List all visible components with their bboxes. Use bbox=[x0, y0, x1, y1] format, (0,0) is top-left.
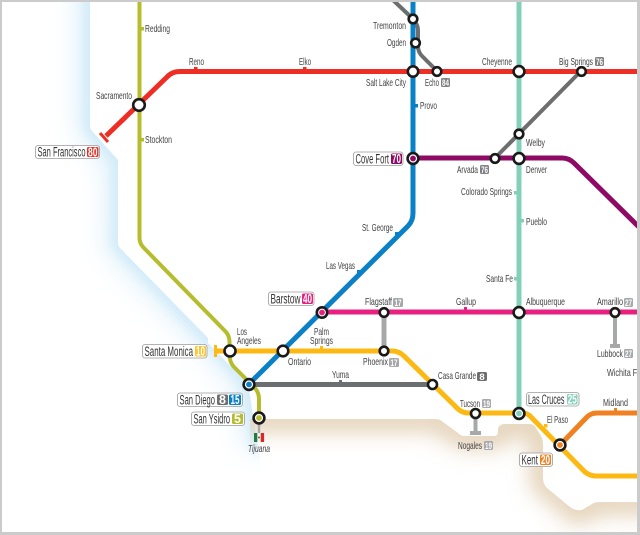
label: Reno: Reno bbox=[189, 56, 204, 68]
spur: Interstate 17 bbox=[382, 312, 386, 351]
line: Interstate 70 purple bbox=[413, 158, 640, 228]
terminal: Santa Monica bbox=[214, 345, 217, 357]
callout: San Ysidro 5: San Ysidro bbox=[194, 411, 230, 426]
label: Nogales 19: Nogales bbox=[458, 440, 482, 452]
label: Nogales 19: 19 bbox=[485, 441, 492, 452]
stations bbox=[133, 15, 619, 418]
label: Cheyenne: Cheyenne bbox=[482, 56, 512, 68]
terminal: San Francisco bbox=[100, 133, 108, 142]
spur: Interstate 27 bbox=[610, 312, 620, 346]
tick marks blue bbox=[357, 104, 418, 274]
station: Cove Fort bbox=[408, 153, 418, 164]
label: Arvada 76: Arvada bbox=[457, 164, 478, 176]
station: San Diego bbox=[244, 379, 254, 390]
line: Interstate 8 gray bbox=[249, 382, 432, 387]
label: Amarillo 27: 27 bbox=[625, 298, 632, 309]
callout: Kent 20: 20 bbox=[541, 453, 550, 467]
connector to Tijuana bbox=[258, 424, 260, 433]
label: Los Angeles bbox=[237, 326, 261, 347]
line: Interstate 80 red bbox=[106, 72, 637, 136]
line: Interstate 10 yellow bbox=[216, 351, 637, 476]
label: Las Vegas: Las Vegas bbox=[326, 260, 355, 272]
callout: Cove Fort 70: Cove Fort bbox=[356, 151, 389, 166]
line: Interstate 15 blue bbox=[249, 0, 413, 384]
label: Los Angeles: Angeles bbox=[237, 335, 261, 347]
label: Echo 84: Echo bbox=[425, 77, 439, 89]
label: Gallup: Gallup bbox=[456, 296, 476, 308]
land: Mexico bbox=[240, 419, 640, 512]
callout: Barstow 40: Barstow bbox=[270, 291, 301, 306]
callout: Santa Monica 10: 10 bbox=[196, 344, 205, 358]
callout: Kent 20: Kent bbox=[522, 452, 538, 467]
label: Palm Springs: Springs bbox=[310, 335, 333, 347]
label: Lubbock 27: Lubbock bbox=[597, 348, 623, 360]
label: Tucson 19: Tucson bbox=[460, 398, 480, 410]
water: Pacific coast bbox=[90, 0, 258, 450]
label: Midland: Midland bbox=[603, 397, 628, 409]
label: Big Springs 76: 76 bbox=[596, 57, 603, 68]
label: Tucson 19: 19 bbox=[483, 399, 490, 410]
label: Elko: Elko bbox=[299, 56, 311, 68]
station: San Ysidro bbox=[254, 413, 264, 423]
label: Casa Grande 8: Casa Grande bbox=[438, 370, 476, 382]
label: Phoenix 17: 17 bbox=[390, 358, 398, 369]
callout: San Ysidro 5: 5 bbox=[234, 412, 241, 426]
label: Colorado Springs: Colorado Springs bbox=[461, 186, 512, 198]
label: Echo 84: 84 bbox=[442, 78, 449, 89]
label: Santa Fe: Santa Fe bbox=[486, 273, 513, 285]
tick marks bbox=[194, 67, 306, 70]
label: Ontario: Ontario bbox=[288, 356, 311, 368]
callout: Las Cruces 25: 25 bbox=[568, 392, 577, 406]
label: Stockton: Stockton bbox=[145, 134, 172, 146]
label: Sacramento: Sacramento bbox=[96, 90, 132, 102]
label: Flagstaff 17: 17 bbox=[394, 298, 402, 309]
label: Denver: Denver bbox=[526, 164, 547, 176]
label: Amarillo 27: Amarillo bbox=[597, 296, 623, 308]
station: Kent bbox=[555, 440, 565, 450]
label: Phoenix 17: Phoenix bbox=[363, 356, 388, 368]
callout: San Diego 8 15: San Diego bbox=[180, 392, 215, 407]
spur: Interstate 19 bbox=[470, 413, 481, 433]
callout: Cove Fort 70: 70 bbox=[392, 152, 401, 166]
label: Lubbock 27: 27 bbox=[625, 349, 632, 360]
label: Los Angeles: Los bbox=[237, 326, 247, 338]
line: Interstate 40 pink bbox=[322, 310, 637, 314]
label: Pueblo: Pueblo bbox=[526, 216, 547, 228]
label: Redding: Redding bbox=[145, 23, 170, 35]
callout: San Francisco 80: San Francisco bbox=[38, 144, 86, 160]
label: Ogden: Ogden bbox=[387, 37, 406, 49]
line: Interstate 5 olive bbox=[140, 0, 259, 418]
tick marks others bbox=[320, 307, 617, 428]
station: Barstow bbox=[317, 307, 327, 318]
line: Interstate 20 orange bbox=[560, 413, 637, 445]
callout: Barstow 40: 40 bbox=[303, 292, 312, 306]
label: El Paso: El Paso bbox=[547, 414, 568, 426]
label: Casa Grande 8: 8 bbox=[479, 372, 485, 383]
label: Provo: Provo bbox=[420, 100, 437, 112]
tick marks teal bbox=[514, 191, 524, 280]
callout: Santa Monica 10: Santa Monica bbox=[144, 344, 193, 359]
label: Palm Springs bbox=[310, 326, 333, 347]
icon: Mexican flag bbox=[254, 433, 264, 442]
label: Flagstaff 17: Flagstaff bbox=[365, 296, 392, 308]
line: Interstate 25 teal bbox=[516, 0, 522, 413]
callout: Las Cruces 25: Las Cruces bbox=[528, 392, 565, 407]
label: Tremonton: Tremonton bbox=[373, 20, 406, 32]
label: Salt Lake City: Salt Lake City bbox=[366, 77, 406, 89]
callout: San Diego 8 15: 15 bbox=[230, 393, 240, 407]
label: Albuquerque: Albuquerque bbox=[526, 296, 565, 308]
line: Interstate 84 gray bbox=[393, 0, 437, 71]
label: Welby: Welby bbox=[526, 137, 545, 149]
label: Arvada 76: 76 bbox=[481, 165, 488, 176]
label: St. George: St. George bbox=[362, 222, 393, 234]
callout: San Diego 8 15: 8 bbox=[219, 393, 226, 407]
callout: San Francisco 80: 80 bbox=[88, 145, 97, 159]
label: Tijuana: Tijuana bbox=[248, 443, 270, 455]
label: Palm Springs: Palm bbox=[314, 326, 329, 338]
line: Interstate 76 gray bbox=[495, 71, 581, 158]
station: Las Cruces bbox=[514, 408, 524, 419]
tick marks olive bbox=[141, 27, 144, 142]
label: Yuma: Yuma bbox=[332, 369, 349, 381]
label: Big Springs 76: Big Springs bbox=[559, 56, 593, 68]
